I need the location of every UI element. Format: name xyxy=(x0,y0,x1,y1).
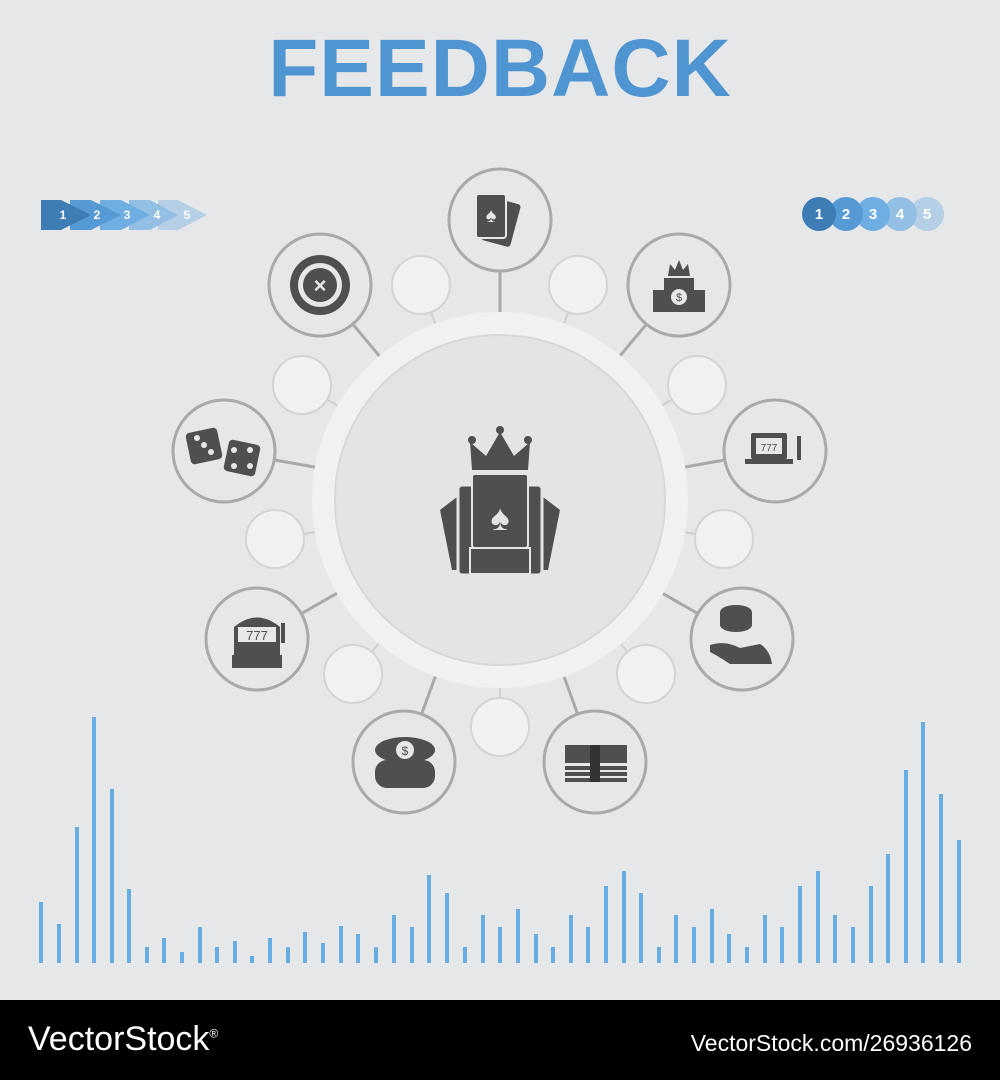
icon: slot machine: 777 xyxy=(246,628,268,643)
icon: roulette chip xyxy=(290,255,350,315)
step arrows: 3 xyxy=(124,208,131,222)
step arrows: 1 xyxy=(60,208,67,222)
numbered circles: 3 xyxy=(869,206,877,223)
icon: slot machine xyxy=(232,618,285,668)
step arrows: 2 xyxy=(94,208,101,222)
footer watermark bar: VectorStock.com/26936126 xyxy=(691,1030,972,1056)
numbered circles: 2 xyxy=(842,206,850,223)
icon: money stack xyxy=(565,745,627,782)
ring xyxy=(312,312,688,688)
center circle xyxy=(335,335,665,665)
small circles xyxy=(246,256,753,756)
numbered circles: 1 xyxy=(815,206,823,223)
icon: center king cards: ♠ xyxy=(490,497,510,538)
icon: chip stack: $ xyxy=(402,744,409,758)
icon: chip stack xyxy=(375,737,435,788)
icon: laptop slot xyxy=(745,433,801,464)
footer watermark bar xyxy=(0,1000,1000,1080)
icon: center king cards xyxy=(440,426,560,575)
numbered circles: 5 xyxy=(923,206,931,223)
numbered circles: 4 xyxy=(896,206,905,223)
footer watermark bar: VectorStock® xyxy=(28,1020,218,1058)
icon: roulette chip: × xyxy=(314,273,326,298)
icon circles xyxy=(173,169,826,813)
numbered circles xyxy=(802,197,944,231)
icon: casino building: $ xyxy=(676,292,682,304)
icon: casino building xyxy=(653,260,705,312)
icon: dice xyxy=(185,427,261,477)
icons xyxy=(185,194,801,788)
icon: laptop slot: 777 xyxy=(761,443,778,454)
connectors xyxy=(224,220,775,762)
step arrows: 4 xyxy=(154,208,161,222)
icon: cards: ♠ xyxy=(486,205,497,227)
step arrows: 5 xyxy=(184,208,191,222)
icon: cards xyxy=(476,194,521,247)
icon: hand chips xyxy=(710,605,772,664)
step arrows xyxy=(41,200,207,230)
bar chart xyxy=(39,717,961,963)
title: FEEDBACK xyxy=(268,23,732,114)
